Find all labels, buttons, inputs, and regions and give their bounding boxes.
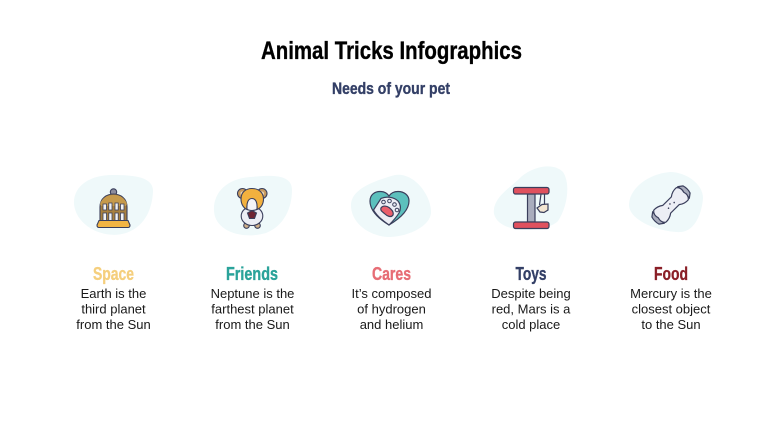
icon: bone [649,183,693,227]
heading: food: Food [654,264,688,284]
blob: cares [351,175,431,237]
text: cares: and helium [360,317,423,332]
text: space: Earth is the [81,286,146,301]
subtitle: Needs of your pet [332,79,450,98]
icon: hamster [238,188,267,228]
text: food: Mercury is the [630,286,712,301]
icon: scratching post [514,188,549,228]
heading: friends: Friends [226,264,278,284]
heading: toys: Toys [516,264,546,284]
text: cares: It’s composed [352,286,431,301]
blob: toys [494,166,567,230]
blob: friends [214,176,292,235]
text: friends: Neptune is the [211,286,294,301]
panel: food [629,172,712,332]
heading: cares: Cares [372,264,411,284]
text: space: from the Sun [76,317,151,332]
panel: toys [491,166,571,332]
blob: food [629,172,703,232]
text: space: third planet [81,302,146,316]
panel: friends [211,176,294,332]
icon: heart with paw [370,192,409,225]
blob: space [74,175,153,235]
title: Animal Tricks Infographics [261,37,522,65]
icon: bird cage [97,189,130,228]
text: friends: from the Sun [215,317,290,332]
panel: cares [351,175,431,332]
text: food: to the Sun [641,317,701,332]
text: toys: Despite being [491,286,571,301]
panel: space [74,175,153,332]
text: food: closest object [632,302,711,316]
text: friends: farthest planet [211,302,294,316]
text: cares: of hydrogen [357,302,426,316]
text: toys: cold place [502,317,560,332]
heading: space: Space [93,264,134,284]
text: toys: red, Mars is a [492,302,571,316]
